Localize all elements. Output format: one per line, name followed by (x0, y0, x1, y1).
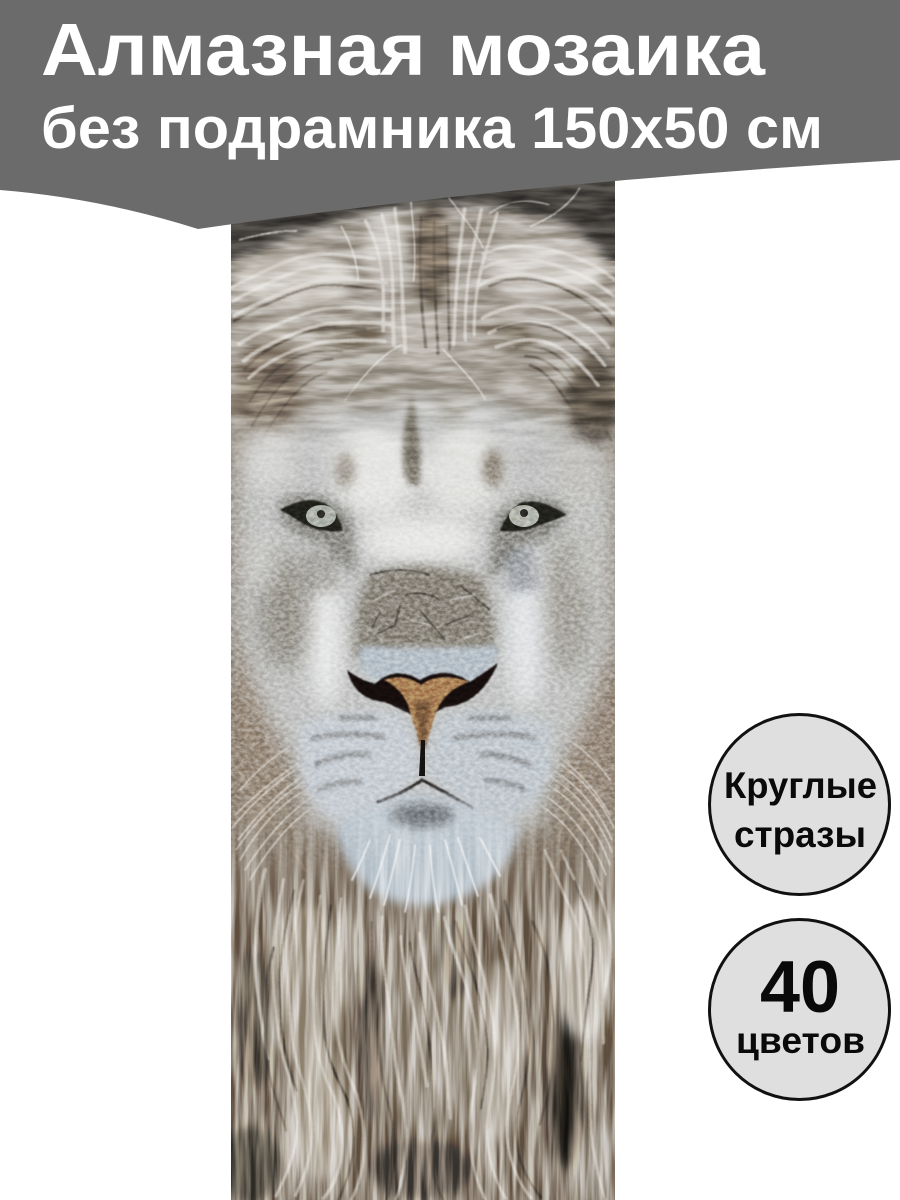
eye left (280, 500, 343, 531)
lion portrait photo (220, 181, 621, 1200)
badge: 40 colours (710, 920, 890, 1100)
mouth (378, 780, 472, 808)
upper mane (231, 190, 618, 470)
muzzle bridge (355, 566, 497, 682)
title line 1: Алмазная мозаика (41, 8, 766, 91)
nose (347, 663, 498, 748)
header banner (0, 0, 900, 229)
face base shape (236, 399, 612, 830)
badge: 40 colours: 40 (760, 947, 840, 1028)
dark backdrop behind mane (231, 181, 615, 261)
title (41, 8, 823, 161)
muzzle pads (300, 712, 552, 825)
fur texture overlays (231, 181, 615, 1200)
eye shadows and tear marks (280, 494, 565, 595)
badge: round rhinestones: Круглые (724, 765, 877, 806)
lion face (236, 386, 612, 912)
title line 2: без подрамника 150х50 см (41, 96, 823, 161)
badge: round rhinestones (710, 714, 890, 894)
badge: round rhinestones: стразы (734, 814, 866, 855)
chin beard (335, 792, 520, 912)
lower mane (220, 650, 621, 1200)
badge: 40 colours: цветов (736, 1020, 865, 1061)
eye right (500, 502, 567, 531)
forehead marks (403, 395, 420, 486)
